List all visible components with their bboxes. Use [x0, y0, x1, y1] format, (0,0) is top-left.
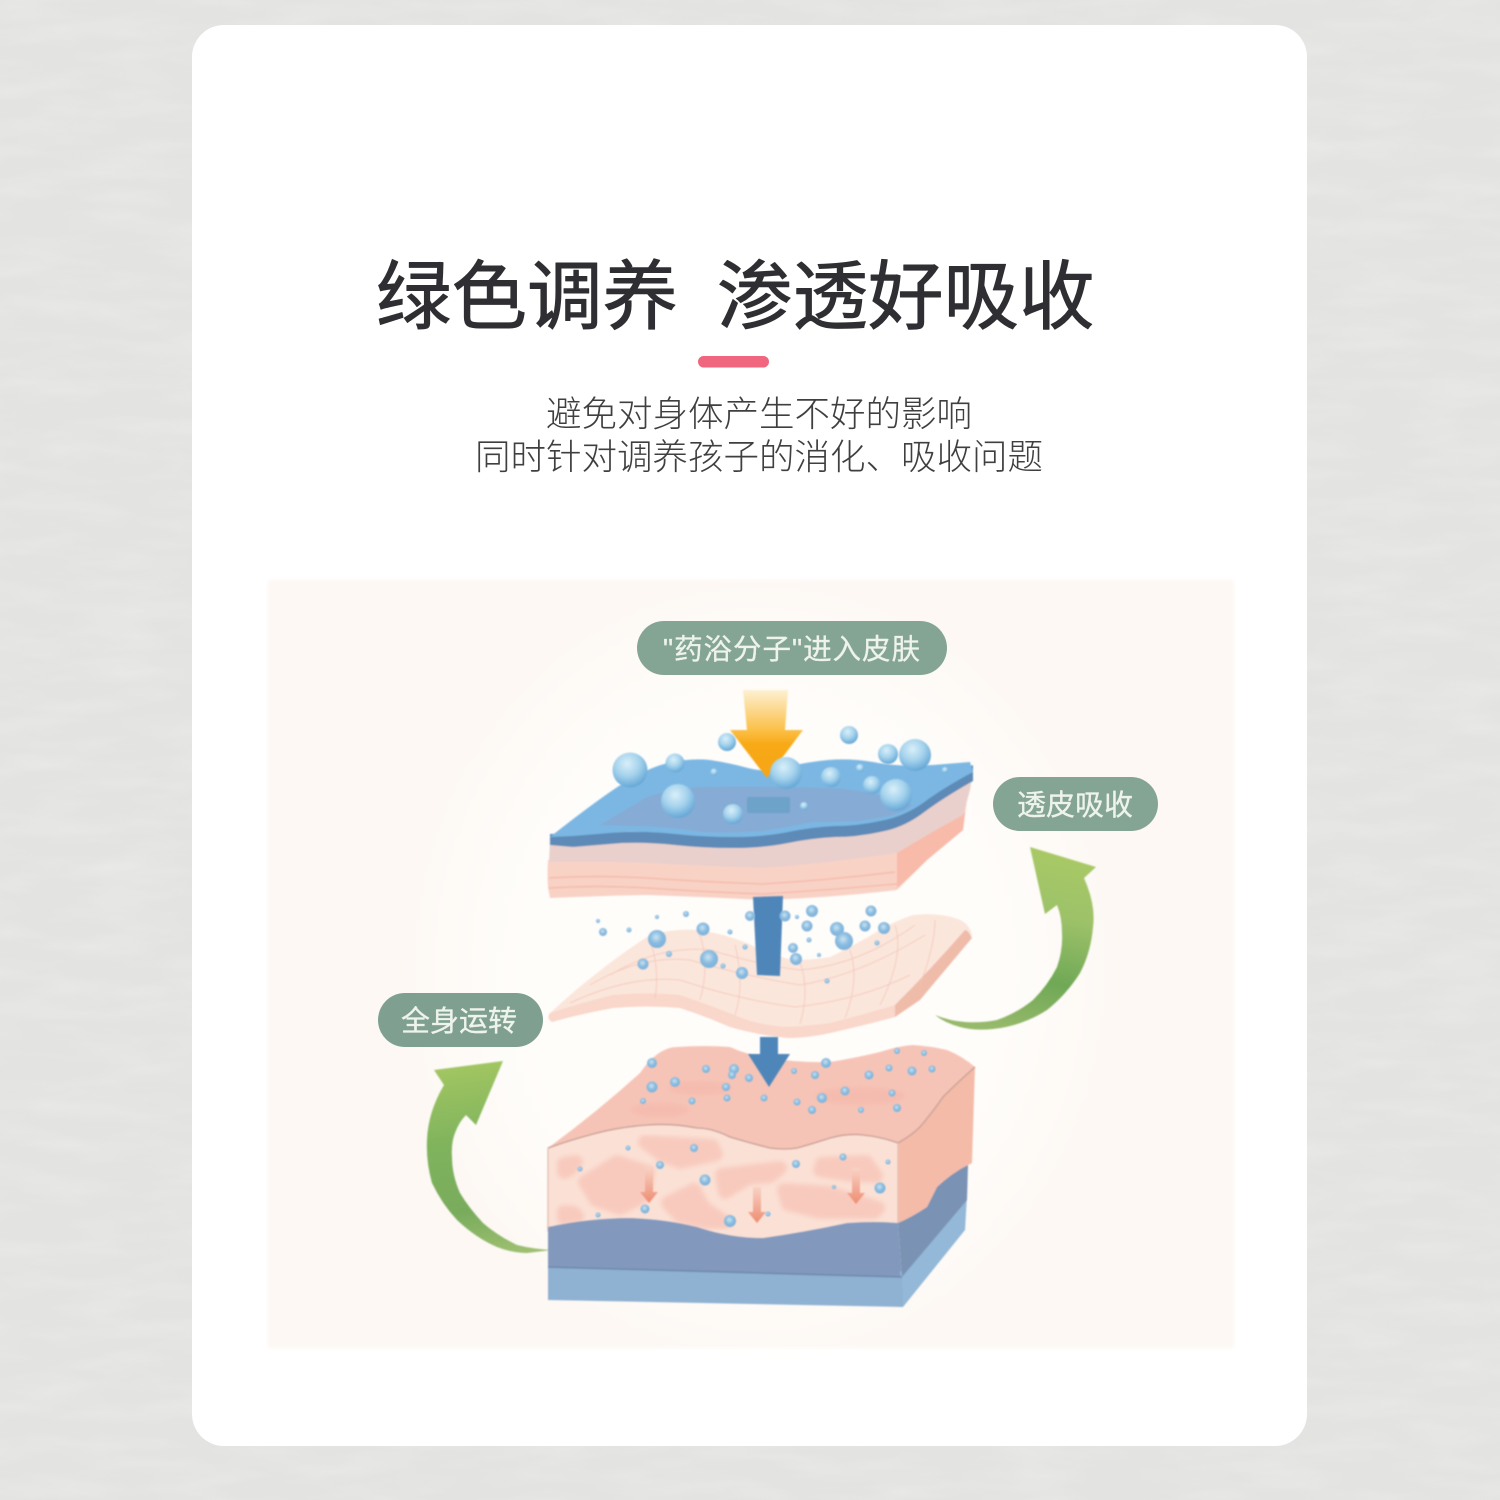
- subtitle: 同时针对调养孩子的消化、吸收问题: [475, 437, 1043, 477]
- label: whole-body circulation: [378, 993, 543, 1047]
- subtitle: 避免对身体产生不好的影响: [546, 394, 972, 434]
- particles in bottom block: [578, 1048, 936, 1227]
- blue patch: [747, 797, 790, 813]
- title: 渗透好吸收: [717, 255, 1095, 339]
- bottom band: [548, 1267, 903, 1307]
- blue arrow: lower: [748, 1037, 790, 1087]
- greyish pink layer: [549, 772, 973, 868]
- skin layer: top stack: [548, 759, 973, 900]
- salmon layer: [548, 800, 967, 900]
- blue arrow: upper: [753, 896, 783, 976]
- skin layer: middle sheet: [548, 914, 972, 1038]
- sheet grid lines: [570, 920, 935, 1024]
- dark blue edge: [550, 765, 973, 848]
- arrow: green right: [935, 847, 1096, 1030]
- salmon stripes: [549, 872, 897, 894]
- block front face: [548, 1124, 898, 1245]
- orange arrow: [730, 690, 803, 778]
- top surface blotches: [630, 1081, 905, 1117]
- salmon right face: [897, 812, 965, 888]
- bubbles on top layer: [612, 726, 948, 824]
- sheet front band: [548, 994, 895, 1038]
- skin layer: bottom block: [548, 1045, 975, 1307]
- arrow: green left: [427, 1061, 552, 1253]
- label: molecules enter skin: "药浴分子"进入皮肤: [663, 634, 920, 666]
- bottom band right side: [900, 1195, 967, 1307]
- label: transdermal absorption: 透皮吸收: [1017, 789, 1133, 822]
- small red arrows: [640, 1167, 865, 1223]
- subtitle: [475, 394, 1043, 477]
- white card: [192, 25, 1307, 1446]
- tissue cells: [564, 1142, 878, 1222]
- top surface outline: [548, 1067, 975, 1149]
- block top surface: [548, 1045, 975, 1149]
- bubbles around middle sheet: [596, 905, 890, 984]
- sheet body: [548, 914, 972, 1038]
- label: molecules enter skin: [637, 621, 947, 675]
- sheet right edge: [895, 930, 972, 1017]
- slate layer: [548, 1218, 902, 1277]
- title: 绿色调养: [376, 255, 678, 339]
- panel: skin absorption diagram: [268, 570, 1234, 1370]
- blue inner region: [600, 787, 913, 832]
- slate right side: [898, 1165, 968, 1277]
- label: transdermal absorption: [993, 777, 1158, 831]
- accent bar: [698, 356, 769, 368]
- label: whole-body circulation: 全身运转: [401, 1005, 517, 1038]
- block right side: [898, 1067, 975, 1223]
- title: [376, 255, 1095, 339]
- blue surface: [550, 759, 973, 837]
